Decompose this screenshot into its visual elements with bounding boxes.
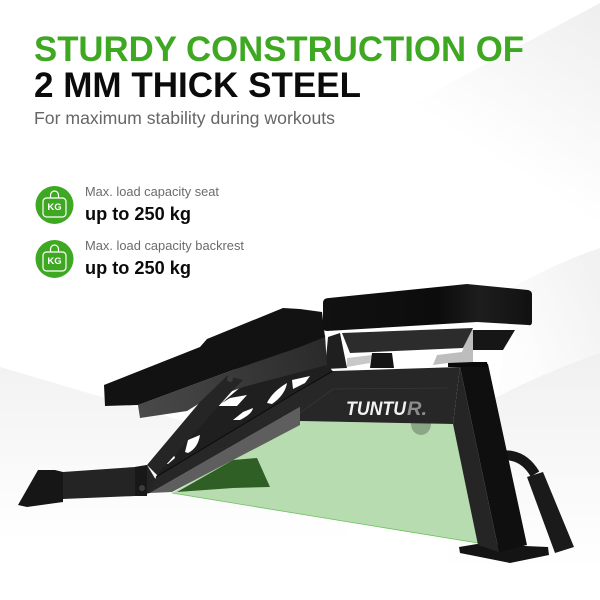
handle tube	[486, 455, 535, 474]
rear frame upright	[448, 362, 527, 552]
pivot bolts	[139, 376, 233, 491]
spec label: Max. load capacity seat	[85, 184, 219, 199]
icon: KG weight bag: KG	[47, 256, 62, 267]
heading: 2 MM THICK STEEL	[34, 66, 361, 105]
seat supports	[325, 328, 515, 369]
brand logo: R.	[407, 399, 427, 420]
handle grip	[527, 472, 574, 553]
icon: KG weight bag: KG	[47, 202, 62, 213]
green highlighted steel panel	[172, 413, 478, 543]
icon: KG weight bag	[36, 186, 74, 224]
backrest lower plate	[138, 335, 327, 418]
backrest pad	[104, 308, 325, 406]
heading: STURDY CONSTRUCTION OF	[34, 30, 524, 69]
front foot and arm	[18, 465, 156, 507]
base plate	[459, 544, 549, 563]
subheading: For maximum stability during workouts	[34, 108, 335, 128]
frame beam and panel	[150, 367, 460, 493]
brand logo: TUNTU	[346, 399, 407, 420]
spec value: up to 250 kg	[85, 204, 191, 224]
seat pad	[323, 284, 532, 331]
rail cut-outs	[163, 376, 310, 464]
spec: backrest load capacity	[36, 238, 244, 278]
weight bench	[18, 284, 574, 563]
spec value: up to 250 kg	[85, 258, 191, 278]
slotted plate	[156, 363, 333, 477]
diagonal strut	[147, 376, 243, 475]
heading	[34, 30, 524, 105]
icon: KG weight bag	[36, 240, 74, 278]
spec label: Max. load capacity backrest	[85, 238, 244, 253]
spec: seat load capacity	[36, 184, 219, 224]
